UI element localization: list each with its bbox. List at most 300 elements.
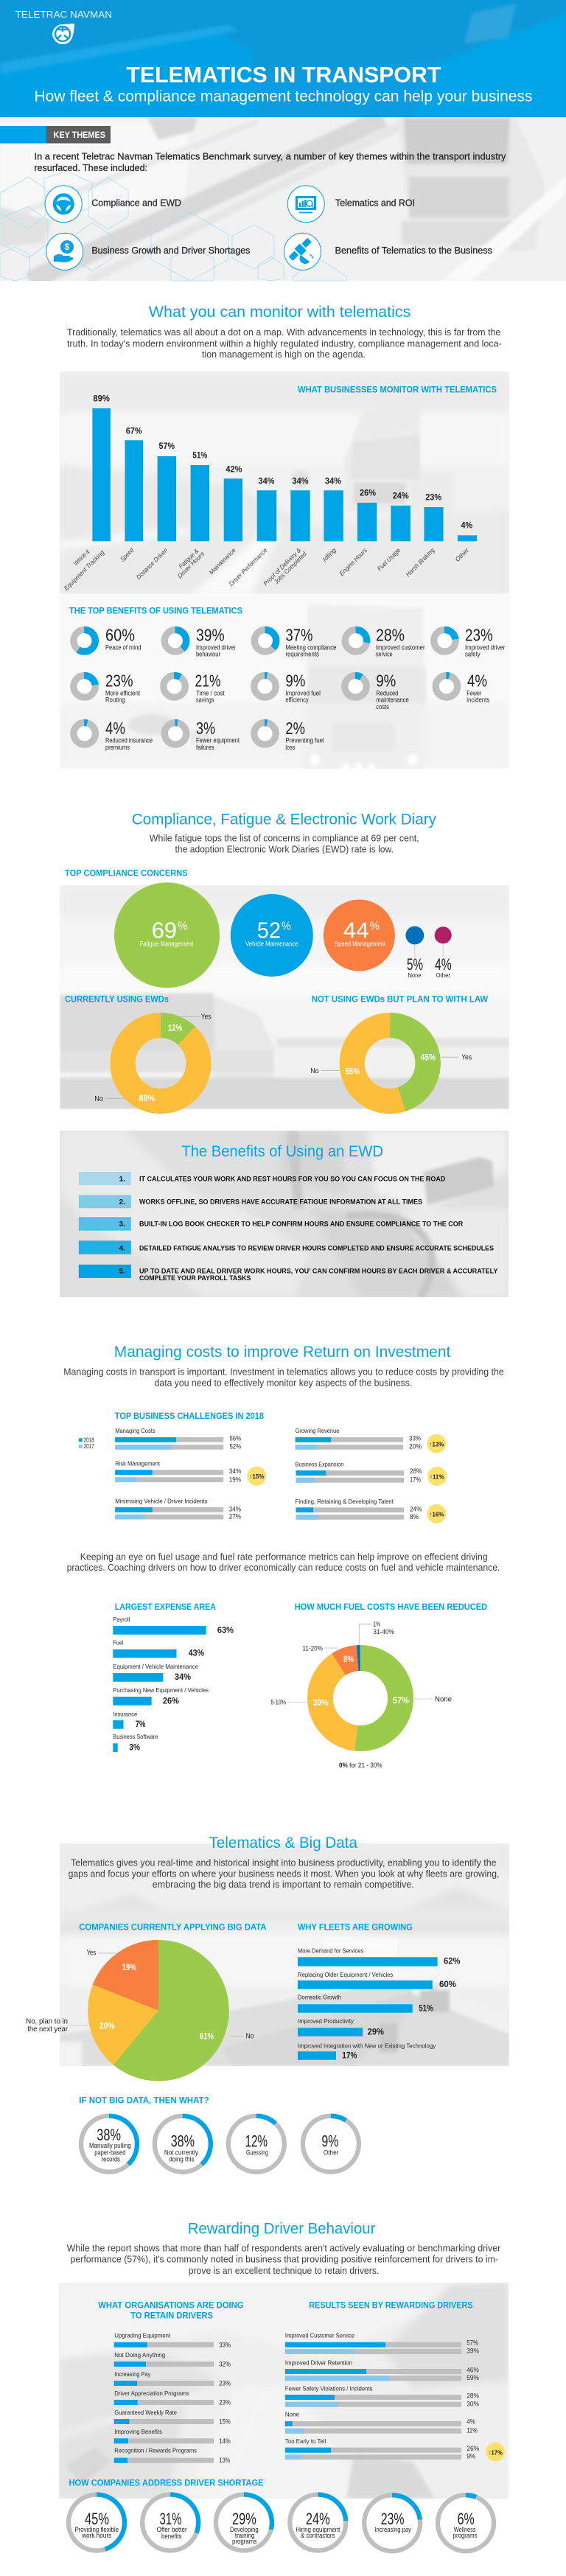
donut grid: top benefits: behaviour xyxy=(196,650,220,658)
bar chart: largest expense area: 3% xyxy=(129,1743,140,1752)
text block: intro: Managing costs in transport is important. Investment in telematics allows you to reduce costs by providing the xyxy=(63,1367,504,1378)
ring: manually pulling records xyxy=(81,2116,137,2172)
bar chart: what businesses monitor: Driver Performance xyxy=(228,546,269,587)
logo: wordmark: TELETRAC NAVMAN xyxy=(15,9,112,20)
bar group: risk management: Risk Management xyxy=(115,1459,161,1467)
bar group: business expansion: Business Expansion xyxy=(296,1460,343,1467)
donut grid: top benefits: 39% xyxy=(196,625,225,644)
section: key themes xyxy=(0,117,566,281)
bar chart: largest expense area: 43% xyxy=(189,1650,204,1658)
heading: The Benefits of Using an EWD xyxy=(181,1143,383,1160)
bar chart: what businesses monitor: 42% xyxy=(226,465,242,474)
chart title xyxy=(98,2300,244,2321)
bar chart: why fleets are growing: 62% xyxy=(444,1958,460,1966)
pie chart: companies applying big data: No xyxy=(246,2032,254,2041)
bar group: finding talent: ↑16% xyxy=(429,1510,444,1518)
bar chart: results of rewarding drivers xyxy=(285,2332,505,2462)
bar chart: retaining drivers: 23% xyxy=(219,2380,231,2388)
bar chart: results of rewarding drivers: Too Early to Tell xyxy=(285,2437,326,2445)
bar chart: results of rewarding drivers: ↑17% xyxy=(489,2448,503,2456)
section: what you can monitor xyxy=(60,304,509,770)
bubble: none: None xyxy=(408,971,422,979)
bar chart: results of rewarding drivers: 59% xyxy=(467,2374,479,2382)
bar chart: largest expense area: Fuel xyxy=(113,1639,124,1647)
list item 5 xyxy=(79,1265,498,1282)
bar chart: what businesses monitor: Speed xyxy=(119,546,136,563)
list item 5: UP TO DATE AND REAL DRIVER WORK HOURS, YOU' CAN CONFIRM HOURS BY EACH DRIVER & ACCURATELY xyxy=(139,1268,498,1276)
donut chart: fuel costs reduced: 1% xyxy=(373,1621,381,1629)
ring: developing training programs: Developing xyxy=(230,2525,259,2533)
text block: fuel: Keeping an eye on fuel usage and fuel rate performance metrics can help improve on effecient driving xyxy=(80,1551,488,1562)
label: key themes tab xyxy=(0,126,111,143)
legend: 2018 xyxy=(84,1437,94,1444)
ring: not currently doing this: 38% xyxy=(171,2132,195,2150)
bar chart: retaining drivers: Increasing Pay xyxy=(114,2370,151,2378)
donut grid: top benefits: service xyxy=(376,650,392,658)
donut chart: fuel costs reduced: None xyxy=(435,1695,452,1704)
text block: intro: embracing the big data trend is important to remain competitive. xyxy=(153,1879,414,1890)
bar chart: retaining drivers: 33% xyxy=(219,2342,231,2350)
bar group: minimising incidents xyxy=(115,1497,241,1521)
donut chart: plan to use EWDs: 55% xyxy=(345,1067,360,1076)
list item 4: 4. xyxy=(119,1244,125,1252)
theme label: growth: Business Growth and Driver Shortages xyxy=(91,245,250,256)
bar chart: retaining drivers: 23% xyxy=(219,2399,231,2407)
chart title: COMPANIES CURRENTLY APPLYING BIG DATA xyxy=(79,1921,267,1932)
chart title: WHAT ORGANISATIONS ARE DOING xyxy=(98,2300,244,2311)
pie chart: companies applying big data xyxy=(26,1949,254,2046)
donut grid: top benefits: Improved driver xyxy=(465,643,505,652)
bar chart: retaining drivers: 13% xyxy=(219,2457,231,2465)
text block: intro xyxy=(63,1367,504,1388)
donut grid: top benefits: Improved driver xyxy=(196,643,236,652)
donut grid: top benefits: 4% xyxy=(467,671,487,690)
bar group: managing costs: 52% xyxy=(230,1442,241,1451)
heading: Managing costs to improve Return on Investment xyxy=(114,1344,450,1361)
donut chart: fuel costs reduced: 8% xyxy=(343,1655,354,1664)
donut grid: top benefits: safety xyxy=(465,650,481,658)
ring: guessing xyxy=(228,2116,284,2172)
icon: satellite xyxy=(284,233,321,270)
bar group: growing revenue: 20% xyxy=(409,1442,422,1451)
decoration: hexagon network xyxy=(0,171,346,281)
bar chart: retaining drivers: Driver Appreciation Programs xyxy=(114,2390,189,2397)
donut grid: top benefits: Improved customer xyxy=(376,643,425,652)
text block: intro: truth. In today's modern environment within a highly regulated industry, compliance management and loca- xyxy=(67,338,502,349)
ring: flexible work hours xyxy=(69,2494,125,2550)
donut grid: top benefits: failures xyxy=(196,743,214,751)
bubble: other: 4% xyxy=(435,955,452,974)
panel: monitor chart background xyxy=(60,371,509,594)
bar chart: results of rewarding drivers: 26% xyxy=(467,2445,480,2453)
bubble: fatigue management xyxy=(114,882,220,988)
ring: developing training programs: 29% xyxy=(232,2510,256,2528)
donut chart: fuel costs reduced: 0% for 21 - 30% xyxy=(339,1762,382,1770)
bar chart: what businesses monitor: Other xyxy=(453,546,471,563)
icon: hand with dollar coin xyxy=(46,233,83,270)
bar chart: what businesses monitor: 89% xyxy=(93,395,110,404)
bubble: vehicle maintenance xyxy=(231,894,313,977)
bar chart: why fleets are growing xyxy=(298,1947,460,2061)
bubble: speed management: % xyxy=(370,921,380,933)
donut grid: top benefits: incidents xyxy=(467,696,490,704)
panel: compliance background xyxy=(60,885,509,1109)
list item 3: 3. xyxy=(119,1220,125,1228)
list item 4 xyxy=(79,1240,495,1254)
bar chart: results of rewarding drivers: 46% xyxy=(467,2366,479,2374)
section: rewarding driver behaviour xyxy=(59,2221,509,2551)
bar chart: what businesses monitor: Idling xyxy=(321,546,338,563)
ring: developing training programs: training xyxy=(235,2531,254,2539)
text block: fuel xyxy=(67,1551,500,1573)
ring: not currently doing this: Not currently xyxy=(164,2148,198,2156)
chart title: CURRENTLY USING EWDs xyxy=(65,994,169,1005)
bar chart: what businesses monitor: 34% xyxy=(258,477,274,486)
bar group: managing costs xyxy=(115,1427,241,1451)
text block: intro: performance (57%), it's commonly noted in business that providing positive reinforcement for drivers to im- xyxy=(71,2254,498,2264)
label: key themes tab: KEY THEMES xyxy=(53,130,105,140)
ring: offer better benefits: Offer better xyxy=(157,2525,187,2533)
pie chart: companies applying big data: Yes xyxy=(87,1949,96,1958)
panel: big data background xyxy=(60,1843,509,2066)
bar chart: what businesses monitor: 4% xyxy=(461,522,472,531)
donut grid: top benefits: Preventing fuel xyxy=(285,736,324,744)
donut grid: top benefits: Reduced xyxy=(376,688,398,697)
donut grid: top benefits: 2% xyxy=(285,719,305,738)
list item 2: 2. xyxy=(119,1198,125,1206)
donut grid: top benefits: Routing xyxy=(105,696,125,704)
bubble: vehicle maintenance: Vehicle Maintenance xyxy=(245,940,298,948)
bar chart: why fleets are growing: More Demand for Services xyxy=(298,1947,364,1954)
ring: increasing pay: Increasing pay xyxy=(374,2525,411,2533)
donut chart: plan to use EWDs: 45% xyxy=(421,1054,436,1063)
ring: offer better benefits xyxy=(142,2494,198,2550)
ring: hiring equipment and contractors xyxy=(290,2494,346,2550)
donut chart: fuel costs reduced: 57% xyxy=(393,1697,409,1706)
bar chart: what businesses monitor: Fuel Usage xyxy=(376,546,402,573)
pie chart: companies applying big data: 19% xyxy=(122,1964,136,1972)
donut grid: top benefits: 9% xyxy=(285,671,305,690)
ring: flexible work hours: work hours xyxy=(81,2531,112,2539)
bubble: fatigue management: % xyxy=(178,921,188,933)
bubble: vehicle maintenance: 52 xyxy=(257,918,281,943)
text block: intro xyxy=(69,1858,499,1890)
theme label: roi: Telematics and ROI xyxy=(335,198,415,208)
list item 5: 5. xyxy=(119,1268,125,1276)
ring: manually pulling records: paper-based xyxy=(94,2148,125,2156)
bar chart: what businesses monitor: Proof of Delivery & xyxy=(262,546,303,587)
bar chart: what businesses monitor: 34% xyxy=(325,477,341,486)
ring: hiring equipment and contractors: & contractors xyxy=(301,2531,335,2539)
donut grid: top benefits: maintenance xyxy=(376,696,409,704)
donut grid: top benefits: Fewer xyxy=(467,688,481,697)
bar group: risk management xyxy=(115,1459,266,1486)
bar chart: retaining drivers: 15% xyxy=(219,2418,231,2426)
bar group: risk management: 34% xyxy=(229,1467,242,1476)
chart title: WHY FLEETS ARE GROWING xyxy=(298,1921,413,1932)
bar chart: what businesses monitor: Fatigue & xyxy=(177,547,200,570)
bar chart: results of rewarding drivers: Improved Driver Retention xyxy=(285,2359,352,2367)
donut grid: top benefits: 4% xyxy=(105,719,125,738)
bar chart: what businesses monitor: 51% xyxy=(192,451,207,460)
bar chart: what businesses monitor: Vehicle & xyxy=(71,548,91,568)
donut grid: top benefits: Reduced insurance xyxy=(105,736,153,744)
text block: intro: While the report shows that more than half of respondents aren't actively evaluating or benchmarking driver xyxy=(67,2244,500,2254)
donut grid: top benefits: requirements xyxy=(285,650,319,658)
bar group: growing revenue: Growing Revenue xyxy=(296,1427,340,1434)
bar group: business expansion: ↑11% xyxy=(430,1473,444,1481)
bar group: growing revenue: ↑13% xyxy=(429,1440,444,1448)
panel: benefits background xyxy=(60,595,509,770)
bar chart: what businesses monitor: Driver Hours xyxy=(176,550,206,580)
text block: fuel: practices. Coaching drivers on how to driver economically can reduce costs on fuel and vehicle maintenance. xyxy=(67,1563,500,1573)
title: TELEMATICS IN TRANSPORT xyxy=(126,63,441,88)
text block: intro: gaps and focus your efforts on where your business needs it most. When you look at why fleets are growing, xyxy=(69,1868,499,1879)
donut grid: top benefits: costs xyxy=(376,702,389,711)
panel: rewarding background xyxy=(59,2283,509,2499)
bar chart: largest expense area xyxy=(113,1616,234,1752)
bar chart: why fleets are growing: Improved Integration with New or Existing Technology xyxy=(298,2042,436,2050)
list item 1: 1. xyxy=(119,1176,125,1184)
chart title: RESULTS SEEN BY REWARDING DRIVERS xyxy=(309,2300,473,2311)
bar chart: what businesses monitor: Engine Hours xyxy=(338,546,368,577)
bar chart: what businesses monitor xyxy=(63,395,477,592)
bar chart: why fleets are growing: 51% xyxy=(419,2004,433,2013)
bar chart: what businesses monitor: Harsh Braking xyxy=(404,546,436,578)
pie chart: companies applying big data: No, plan to in xyxy=(26,2017,68,2025)
list item 4: DETAILED FATIGUE ANALYSIS TO REVIEW DRIVER HOURS COMPLETED AND ENSURE ACCURATE SCHEDULES xyxy=(139,1244,495,1252)
bubble: speed management: Speed Management xyxy=(335,940,385,948)
ring: flexible work hours: 45% xyxy=(85,2510,109,2528)
donut grid: top benefits: 23% xyxy=(465,625,493,644)
bar group: minimising incidents: 27% xyxy=(229,1513,241,1521)
donut chart: currently using EWDs: 12% xyxy=(168,1024,182,1033)
ring: not currently doing this: doing this xyxy=(169,2154,195,2163)
icon: hand with dollar coin: $ xyxy=(65,242,69,252)
ring: manually pulling records: 38% xyxy=(97,2126,121,2144)
text block: intro: prove is an excellent technique to retain drivers. xyxy=(189,2266,379,2276)
list item 5: COMPLETE YOUR PAYROLL TASKS xyxy=(139,1274,251,1282)
donut grid: top benefits: premiums xyxy=(105,743,130,751)
subtitle: How fleet & compliance management technology can help your business xyxy=(34,88,532,105)
bar chart: retaining drivers: Recognition / Rewards Programs xyxy=(114,2447,198,2454)
bubble: vehicle maintenance: % xyxy=(282,921,291,933)
text block: intro: data you need to effectively monitor key aspects of the business. xyxy=(155,1378,412,1388)
bubble: other xyxy=(435,926,452,979)
donut grid: top benefits: 3% xyxy=(196,719,215,738)
icon: logo shield xyxy=(52,24,74,44)
bar chart: retaining drivers: 14% xyxy=(219,2437,231,2446)
ring: not currently doing this xyxy=(155,2116,211,2172)
legend xyxy=(79,1437,94,1450)
donut grid: top benefits: 28% xyxy=(376,625,405,644)
heading: Telematics & Big Data xyxy=(209,1835,357,1851)
bar chart: what businesses monitor: Distance Driven xyxy=(135,546,170,581)
heading: Rewarding Driver Behaviour xyxy=(188,2221,375,2238)
bar chart: what businesses monitor: 67% xyxy=(126,427,142,436)
ring: increasing pay xyxy=(364,2495,420,2551)
ring: developing training programs xyxy=(216,2494,272,2550)
bubble: fatigue management: 69 xyxy=(152,918,177,943)
ring: other: 9% xyxy=(321,2132,338,2150)
ring: flexible work hours: Providing flexible xyxy=(74,2525,119,2533)
bar group: business expansion: 17% xyxy=(410,1476,421,1484)
ring: manually pulling records: Manually pulling xyxy=(89,2141,131,2149)
donut chart: plan to use EWDs: Yes xyxy=(461,1053,472,1061)
chart title: TO RETAIN DRIVERS xyxy=(130,2311,213,2321)
bar group: growing revenue xyxy=(296,1427,446,1453)
donut grid: top benefits: Improved fuel xyxy=(285,688,321,697)
bar chart: results of rewarding drivers: 28% xyxy=(467,2392,479,2401)
donut grid: top benefits: 60% xyxy=(105,625,135,644)
bar chart: largest expense area: Payroll xyxy=(113,1616,130,1623)
bar chart: retaining drivers xyxy=(114,2332,231,2465)
bar chart: what businesses monitor: 34% xyxy=(292,477,308,486)
ring: guessing: 12% xyxy=(245,2132,268,2150)
list item 3 xyxy=(79,1217,463,1231)
bar chart: what businesses monitor: Jobs Completed xyxy=(272,550,308,586)
donut grid: top benefits: Fewer equipment xyxy=(196,736,240,744)
chart title: LARGEST EXPENSE AREA xyxy=(115,1602,216,1612)
donut chart: currently using EWDs: No xyxy=(94,1095,103,1103)
bubble: speed management xyxy=(324,899,395,971)
bar group: risk management: ↑15% xyxy=(249,1473,265,1480)
bar chart: retaining drivers: Guaranteed Weekly Rate xyxy=(114,2409,177,2416)
donut grid: top benefits: 9% xyxy=(376,671,396,690)
ring: wellness programs: programs xyxy=(453,2531,478,2539)
bar chart: retaining drivers: Upgrading Equipment xyxy=(114,2332,171,2339)
bubble: speed management: 44 xyxy=(343,918,369,943)
donut grid: top benefits: More efficient xyxy=(105,688,140,697)
bar chart: results of rewarding drivers: 39% xyxy=(467,2348,479,2356)
ring: wellness programs: Wellness xyxy=(454,2525,476,2533)
text block: introduction: In a recent Teletrac Navman Telematics Benchmark survey, a number of key themes within the transport industry xyxy=(34,152,506,162)
bar chart: largest expense area: Purchasing New Equipment / Vehicles xyxy=(113,1686,209,1694)
chart title: TOP BUSINESS CHALLENGES IN 2018 xyxy=(115,1411,264,1421)
bar chart: why fleets are growing: 29% xyxy=(368,2028,384,2037)
donut grid: top benefits: loss xyxy=(285,743,296,751)
text block: introduction xyxy=(34,152,506,173)
ring: wellness programs: 6% xyxy=(458,2510,475,2528)
theme label: compliance: Compliance and EWD xyxy=(91,198,181,208)
ring: hiring equipment and contractors: Hiring equipment xyxy=(296,2525,340,2533)
bar chart: largest expense area: 63% xyxy=(217,1627,234,1636)
section: telematics and big data xyxy=(26,1835,509,2172)
donut chart: fuel costs reduced: 11-20% xyxy=(302,1644,323,1652)
list item 2 xyxy=(79,1195,423,1208)
bar chart: why fleets are growing: Domestic Growth xyxy=(298,1994,341,2001)
list item 1: IT CALCULATES YOUR WORK AND REST HOURS FOR YOU SO YOU CAN FOCUS ON THE ROAD xyxy=(139,1176,445,1184)
donut grid: top benefits: 37% xyxy=(285,625,312,644)
bubble: other: Other xyxy=(436,971,450,979)
text block: intro: While fatigue tops the list of concerns in compliance at 69 per cent, xyxy=(150,834,419,844)
bar chart: what businesses monitor: Maintenance xyxy=(207,546,237,576)
ring: other: Other xyxy=(324,2148,338,2156)
text block: intro xyxy=(150,834,419,854)
chart title: THE TOP BENEFITS OF USING TELEMATICS xyxy=(69,605,242,615)
bar chart: results of rewarding drivers: 30% xyxy=(467,2401,479,2409)
ring: developing training programs: programs xyxy=(232,2537,257,2545)
bar group: minimising incidents: 34% xyxy=(229,1505,241,1513)
donut chart: fuel costs reduced: 5-10% xyxy=(270,1698,286,1706)
bar group: finding talent: 8% xyxy=(410,1513,419,1521)
bar chart: results of rewarding drivers: 11% xyxy=(467,2427,478,2435)
text block: intro xyxy=(67,2244,500,2276)
pie chart: companies applying big data: 20% xyxy=(99,2022,115,2031)
ring: offer better benefits: 31% xyxy=(159,2510,181,2528)
bar group: minimising incidents: Minimising Vehicle / Driver Incidents xyxy=(115,1497,208,1504)
bar chart: what businesses monitor: Equipment Tracking xyxy=(63,548,106,592)
bar group: business expansion xyxy=(296,1460,447,1486)
chart title: HOW MUCH FUEL COSTS HAVE BEEN REDUCED xyxy=(295,1602,488,1612)
ring: offer better benefits: benefits xyxy=(161,2532,182,2540)
donut grid: top benefits: efficiency xyxy=(285,696,309,704)
chart title: HOW COMPANIES ADDRESS DRIVER SHORTAGE xyxy=(69,2478,264,2488)
bar chart: largest expense area: 7% xyxy=(136,1720,145,1729)
bar chart: largest expense area: Insurance xyxy=(113,1711,137,1718)
bar chart: retaining drivers: Not Doing Anything xyxy=(114,2351,165,2359)
chart title: NOT USING EWDs BUT PLAN TO WITH LAW xyxy=(312,994,489,1005)
heading: Compliance, Fatigue & Electronic Work Diary xyxy=(132,811,436,828)
bar chart: what businesses monitor: 24% xyxy=(393,492,409,500)
chart title: WHAT BUSINESSES MONITOR WITH TELEMATICS xyxy=(298,384,497,394)
text block: intro: Traditionally, telematics was all about a dot on a map. With advancements in technology, this is far from the xyxy=(67,327,500,338)
bar chart: retaining drivers: 32% xyxy=(219,2361,231,2369)
list item 2: WORKS OFFLINE, SO DRIVERS HAVE ACCURATE FATIGUE INFORMATION AT ALL TIMES xyxy=(139,1198,423,1206)
bar chart: results of rewarding drivers: None xyxy=(285,2411,299,2418)
bubble: none: 5% xyxy=(407,955,423,974)
donut grid: top benefits: savings xyxy=(196,696,214,704)
bar chart: why fleets are growing: 60% xyxy=(439,1980,456,1989)
pie chart: companies applying big data: 61% xyxy=(200,2033,214,2042)
donut chart: currently using EWDs: 88% xyxy=(139,1095,155,1103)
bubble: fatigue management: Fatigue Management xyxy=(140,940,194,948)
bar chart: results of rewarding drivers: Improved Customer Service xyxy=(285,2332,354,2339)
heading: What you can monitor with telematics xyxy=(149,304,410,321)
list item 3: BUILT-IN LOG BOOK CHECKER TO HELP CONFIRM HOURS AND ENSURE COMPLIANCE TO THE COR xyxy=(139,1220,463,1228)
bar chart: retaining drivers: Improving Benefits xyxy=(114,2428,163,2435)
bar chart: what businesses monitor: 23% xyxy=(425,493,441,502)
bubble: none xyxy=(405,926,424,979)
bar group: finding talent: Finding, Retaining & Developing Talent xyxy=(296,1498,394,1505)
bar chart: largest expense area: Business Software xyxy=(113,1733,158,1740)
donut grid: top benefits: Meeting compliance xyxy=(285,643,336,652)
list item 1 xyxy=(79,1172,445,1185)
bar group: finding talent xyxy=(296,1498,446,1523)
bar chart: results of rewarding drivers: 57% xyxy=(467,2339,478,2348)
ring: wellness programs xyxy=(438,2495,494,2551)
ring: increasing pay: 23% xyxy=(381,2510,405,2528)
bar chart: results of rewarding drivers: Fewer Safety Violations / Incidents xyxy=(285,2384,373,2392)
bar chart: results of rewarding drivers: 9% xyxy=(467,2453,476,2461)
bar group: growing revenue: 33% xyxy=(409,1435,421,1443)
bar chart: what businesses monitor: 26% xyxy=(360,489,376,498)
section: managing costs and ROI xyxy=(63,1344,504,1770)
bar chart: largest expense area: 34% xyxy=(175,1673,191,1682)
text block: intro xyxy=(67,327,502,360)
bar chart: results of rewarding drivers: 4% xyxy=(467,2418,475,2426)
text block: intro: the adoption Electronic Work Diaries (EWD) rate is low. xyxy=(175,844,394,854)
ring: manually pulling records: records xyxy=(102,2154,120,2163)
section: compliance, fatigue and EWD xyxy=(60,811,509,1109)
bar chart: why fleets are growing: 17% xyxy=(342,2052,357,2061)
donut grid: top benefits xyxy=(74,625,505,751)
bar chart: largest expense area: Equipment / Vehicle Maintenance xyxy=(113,1663,198,1670)
donut chart: plan to use EWDs xyxy=(310,1025,472,1101)
donut chart: currently using EWDs: Yes xyxy=(201,1013,211,1022)
theme label: benefits: Benefits of Telematics to the Business xyxy=(335,245,492,256)
section: header banner xyxy=(0,0,566,117)
